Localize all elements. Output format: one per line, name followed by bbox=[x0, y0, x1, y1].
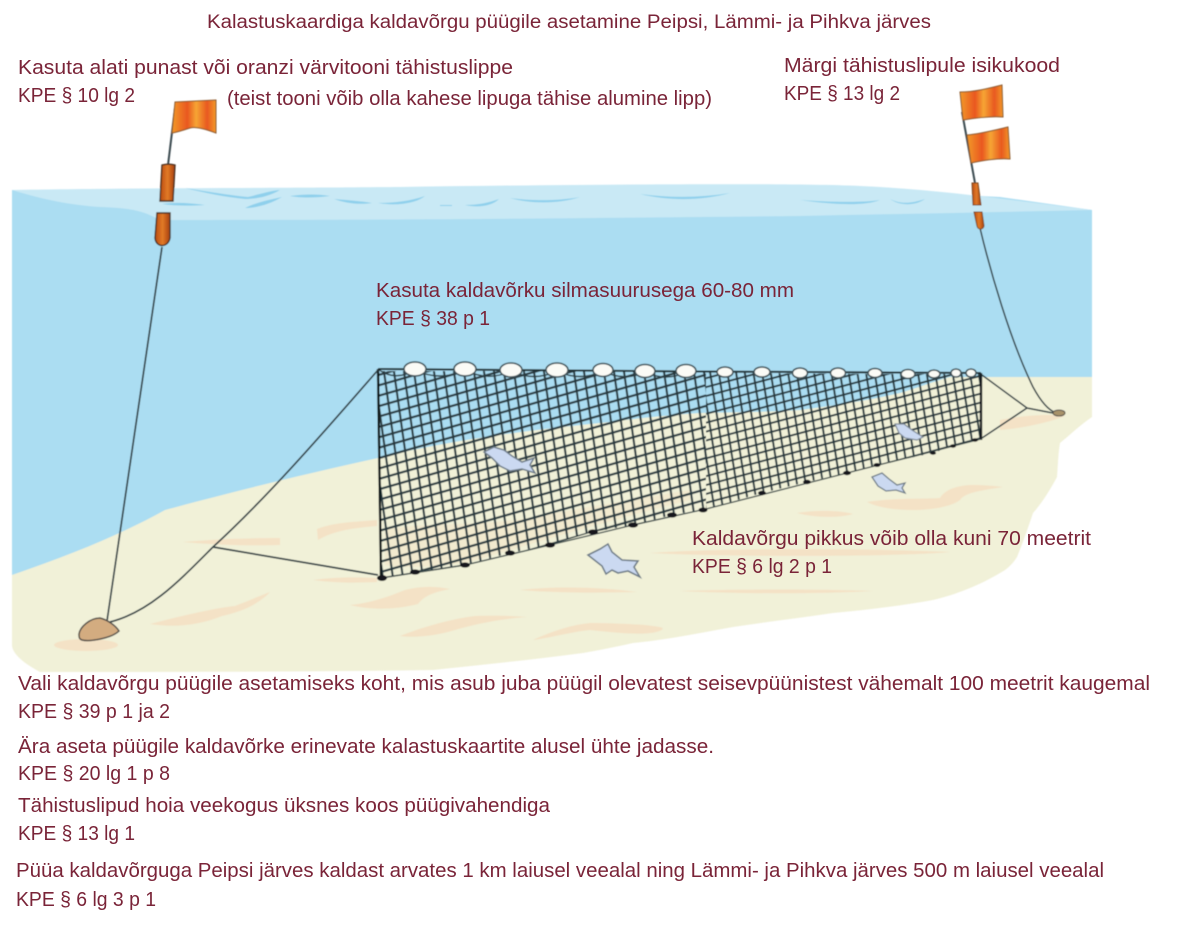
bottom sinkers bbox=[377, 438, 978, 581]
left anchor lines bbox=[107, 247, 378, 622]
fish in net, right bbox=[895, 424, 923, 440]
gill net bbox=[377, 362, 981, 581]
water ripples bbox=[162, 188, 925, 208]
rule: no nets in a row: KPE § 20 lg 1 p 8 bbox=[18, 763, 170, 785]
note: mesh size bbox=[376, 280, 794, 330]
water surface band bbox=[12, 184, 1092, 220]
fish in net bbox=[484, 447, 535, 473]
right anchor lines bbox=[980, 228, 1058, 438]
note: flag colour rule bbox=[18, 57, 513, 107]
note: mesh size: Kasuta kaldavõrku silmasuurusega 60-80 mm bbox=[376, 280, 794, 302]
right marker pole with two flags bbox=[960, 85, 1010, 229]
note: flag colour rule: Kasuta alati punast või oranzi värvitooni tähistuslippe bbox=[18, 57, 513, 79]
note: mesh size: KPE § 38 p 1 bbox=[376, 308, 490, 330]
rule: fishing area width bbox=[16, 860, 1104, 911]
note: net length bbox=[692, 528, 1091, 578]
right anchor stone bbox=[1053, 410, 1065, 416]
rule: distance from other gear bbox=[18, 673, 1150, 723]
sand patches bbox=[54, 415, 1065, 651]
note: personal code: KPE § 13 lg 2 bbox=[784, 83, 900, 105]
left marker pole with flag bbox=[155, 100, 216, 246]
note: personal code bbox=[784, 55, 1060, 105]
sand bbox=[12, 377, 1092, 672]
net mesh: left section bbox=[378, 371, 706, 578]
note: net length: Kaldavõrgu pikkus võib olla kuni 70 meetrit bbox=[692, 528, 1091, 550]
fish on sand, right bbox=[872, 473, 905, 493]
note: flag colour rule: KPE § 10 lg 2 bbox=[18, 85, 135, 107]
rule: flags only with gear: Tähistuslipud hoia veekogus üksnes koos püügivahendiga bbox=[18, 795, 551, 817]
title: Kalastuskaardiga kaldavõrgu püügile asetamine Peipsi, Lämmi- ja Pihkva järves bbox=[207, 12, 931, 33]
note: second flag colour: (teist tooni võib olla kahese lipuga tähise alumine lipp) bbox=[227, 88, 712, 110]
note: personal code: Märgi tähistuslipule isikukood bbox=[784, 55, 1060, 77]
top floats bbox=[404, 362, 976, 378]
note: net length: KPE § 6 lg 2 p 1 bbox=[692, 556, 832, 578]
net mesh: right section bbox=[706, 372, 981, 509]
rule: distance from other gear: Vali kaldavõrgu püügile asetamiseks koht, mis asub juba püügil olevatest seisevpüünistest vähemalt 100 meetrit kaugemal bbox=[18, 673, 1150, 695]
left anchor stone bbox=[79, 618, 119, 641]
rule: distance from other gear: KPE § 39 p 1 ja 2 bbox=[18, 701, 170, 723]
rule: fishing area width: Püüa kaldavõrguga Peipsi järves kaldast arvates 1 km laiusel veealal ning Lämmi- ja Pihkva järves 500 m laiusel veealal bbox=[16, 860, 1104, 882]
rule: fishing area width: KPE § 6 lg 3 p 1 bbox=[16, 889, 156, 911]
water body bbox=[12, 190, 1092, 590]
rule: flags only with gear bbox=[18, 795, 551, 845]
fish on sand, front bbox=[588, 544, 640, 577]
rule: no nets in a row bbox=[18, 736, 714, 785]
net top rope and edges bbox=[378, 369, 981, 373]
illustration: lake cross-section with net bbox=[12, 85, 1092, 672]
rule: flags only with gear: KPE § 13 lg 1 bbox=[18, 823, 135, 845]
rule: no nets in a row: Ära aseta püügile kaldavõrke erinevate kalastuskaartite alusel ühte jadasse. bbox=[18, 736, 714, 758]
